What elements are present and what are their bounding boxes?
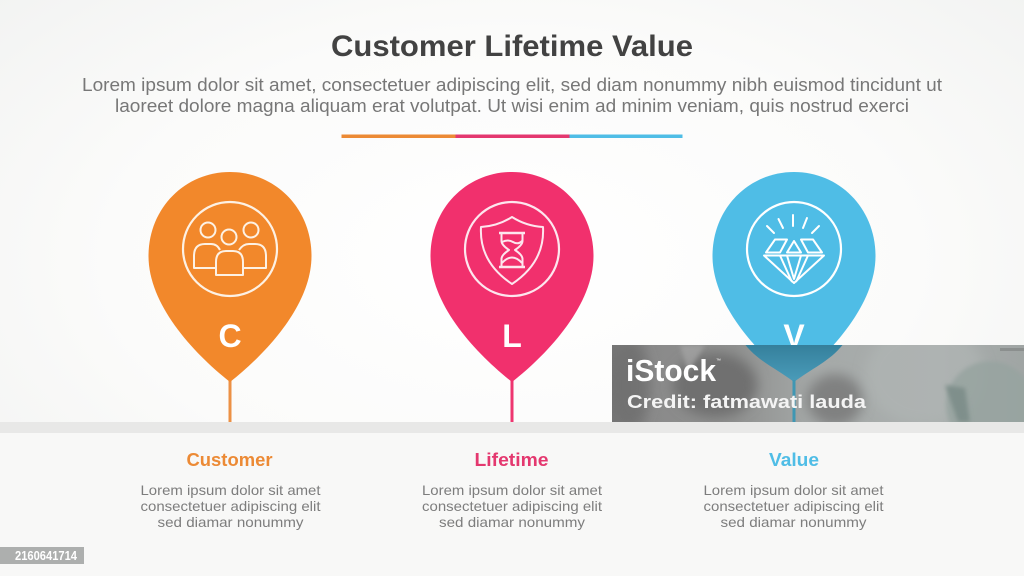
column: lifetime: consectetuer adipiscing elit <box>422 498 602 514</box>
intro text: Lorem ipsum dolor sit amet, consectetuer adipiscing elit, sed diam nonummy nibh euismod tincidunt ut <box>82 74 942 95</box>
column: value <box>704 449 884 530</box>
column: value: consectetuer adipiscing elit <box>704 498 884 514</box>
intro text <box>82 74 942 116</box>
floor below band <box>0 433 1024 576</box>
icon: people <box>194 222 266 275</box>
column: customer: sed diamar nonummy <box>158 514 304 530</box>
column: value: Lorem ipsum dolor sit amet <box>704 482 884 498</box>
iStock logo text: iStock <box>626 354 716 388</box>
column: value: Value <box>769 449 819 470</box>
column: customer: consectetuer adipiscing elit <box>140 498 321 514</box>
letter V: V <box>783 318 805 354</box>
tricolour divider <box>342 134 682 138</box>
column: lifetime: sed diamar nonummy <box>439 514 585 530</box>
column: lifetime: Lorem ipsum dolor sit amet <box>422 482 602 498</box>
pin: customer <box>148 172 312 422</box>
column: customer <box>140 449 321 530</box>
watermark banner <box>612 345 1024 422</box>
floor band <box>0 422 1024 433</box>
icon: diamond <box>764 215 824 283</box>
intro text: laoreet dolore magna aliquam erat volutpat. Ut wisi enim ad minim veniam, quis nostrud exerci <box>115 95 909 116</box>
column: value: sed diamar nonummy <box>720 514 866 530</box>
pin: lifetime <box>430 172 594 422</box>
pin: value <box>712 172 876 422</box>
column: lifetime: Lifetime <box>474 449 548 470</box>
image id tag: 2160641714 <box>15 548 78 563</box>
letter C: C <box>218 318 242 354</box>
column: lifetime <box>422 449 602 530</box>
title: Customer Lifetime Value <box>331 30 693 63</box>
column: customer: Customer <box>186 449 272 470</box>
blue pin tip seen through banner <box>746 345 842 382</box>
credit text: Credit: fatmawati lauda <box>627 391 867 412</box>
trademark mark: ™ <box>716 358 721 364</box>
column: customer: Lorem ipsum dolor sit amet <box>140 482 321 498</box>
icon: shield with hourglass <box>481 217 543 284</box>
letter L: L <box>502 318 522 354</box>
